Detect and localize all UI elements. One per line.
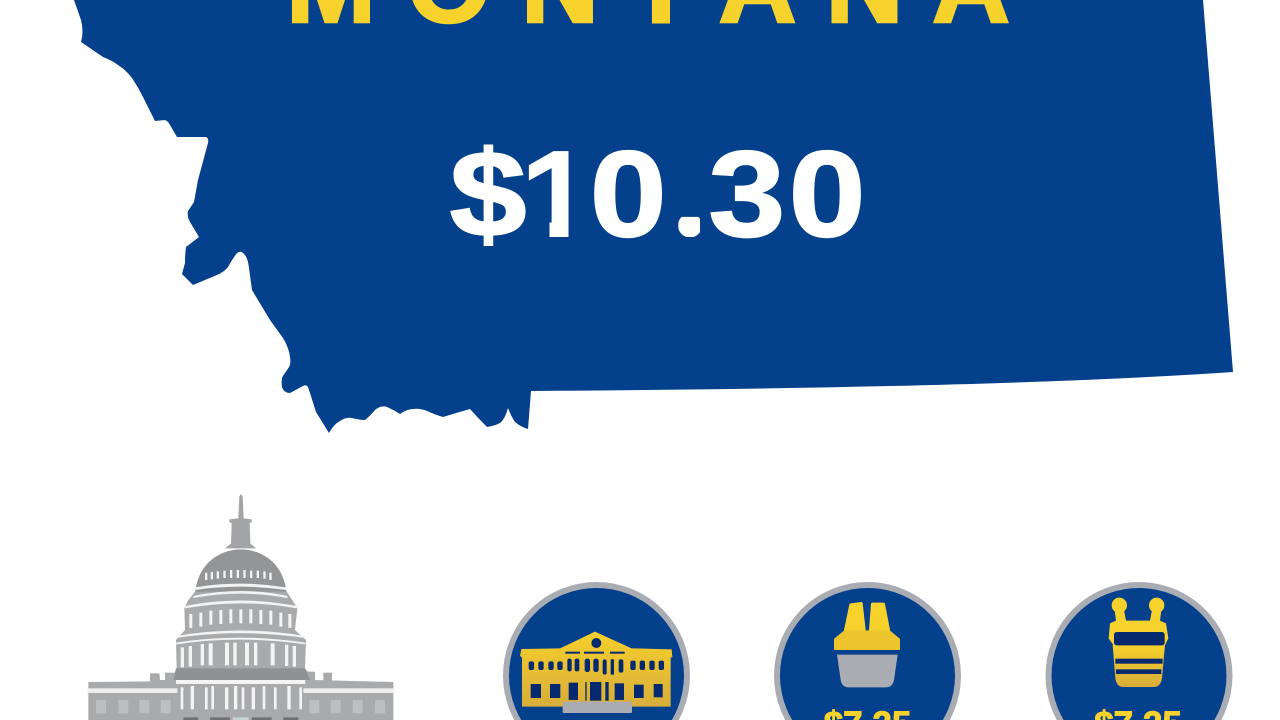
- price: $10.30: $10.30: [450, 125, 865, 262]
- badge: state capitol building: [506, 585, 687, 720]
- map: Montana state silhouette: [74, 0, 1233, 433]
- icon: yellow government building: [520, 632, 672, 713]
- icon: yellow and gray vest: [835, 603, 899, 687]
- icon: capitol building: [87, 494, 393, 720]
- icon: yellow striped vest: [1109, 598, 1168, 687]
- badge: second $7.25 rate: [1048, 585, 1230, 720]
- badge: first $7.25 rate: [777, 585, 958, 720]
